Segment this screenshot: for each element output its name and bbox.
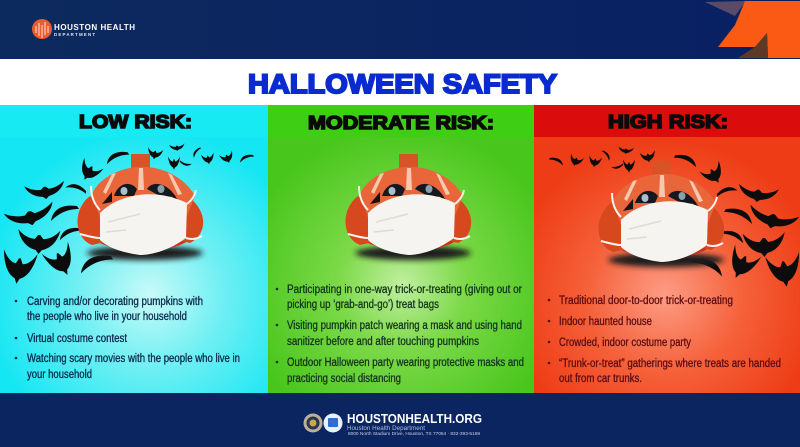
list: low risk activities: Virtual costume contest [27, 333, 128, 345]
list: moderate risk activities: practicing social distancing [287, 373, 401, 385]
title band [0, 59, 800, 105]
footer contact text [347, 411, 482, 436]
list: high risk activities: Crowded, indoor costume party [559, 337, 691, 349]
footer contact text: Houston Health Department [347, 425, 425, 432]
list: low risk activities: Watching scary movies with the people who live in [27, 353, 240, 365]
list: high risk activities: Traditional door-to-door trick-or-treating [559, 295, 733, 307]
list: moderate risk activities: Participating in one-way trick-or-treating (giving out or [287, 284, 522, 296]
footer seals [304, 414, 342, 432]
logo: Houston Health Department [32, 19, 135, 39]
list: low risk activities: your household [27, 369, 92, 381]
list: low risk activities [15, 296, 240, 381]
footer contact text: 8000 North Stadium Drive, Houston, TX 77054 · 832-393-5169 [348, 431, 481, 436]
list: high risk activities: out from car trunks. [559, 373, 642, 385]
list: low risk activities: the people who live in your household [27, 311, 187, 323]
panel: moderate risk [268, 105, 534, 393]
list: moderate risk activities: picking up ‘grab-and-go’) treat bags [287, 299, 439, 311]
list: high risk activities [548, 295, 781, 385]
decorative orange polygons [705, 1, 800, 58]
heading: high risk: HIGH RISK: [608, 111, 728, 132]
list: moderate risk activities: sanitizer before and after touching pumpkins [287, 336, 479, 348]
panel: high risk [534, 105, 800, 393]
header bar [0, 0, 800, 58]
footer contact text: HOUSTONHEALTH.ORG [347, 411, 482, 426]
footer bar [0, 393, 800, 447]
icon: masked pumpkin [77, 154, 203, 260]
list: moderate risk activities: Outdoor Halloween party wearing protective masks and [287, 357, 524, 369]
list: low risk activities: Carving and/or decorating pumpkins with [27, 296, 203, 308]
bats: low risk [0, 144, 254, 286]
list: moderate risk activities: Visiting pumpkin patch wearing a mask and using hand [287, 320, 522, 332]
title: HALLOWEEN SAFETY [248, 69, 557, 99]
panel: low risk [0, 105, 268, 393]
icon: masked pumpkin [345, 154, 471, 260]
logo: Houston Health Department: DEPARTMENT [54, 32, 95, 37]
logo: Houston Health Department: HOUSTON HEALTH [54, 23, 135, 32]
list: moderate risk activities [276, 284, 524, 385]
list: high risk activities: Indoor haunted house [559, 316, 652, 328]
icon: masked pumpkin [598, 161, 724, 267]
heading: moderate risk: MODERATE RISK: [308, 112, 494, 133]
bats: high risk [549, 147, 800, 289]
heading: low risk: LOW RISK: [79, 111, 192, 132]
